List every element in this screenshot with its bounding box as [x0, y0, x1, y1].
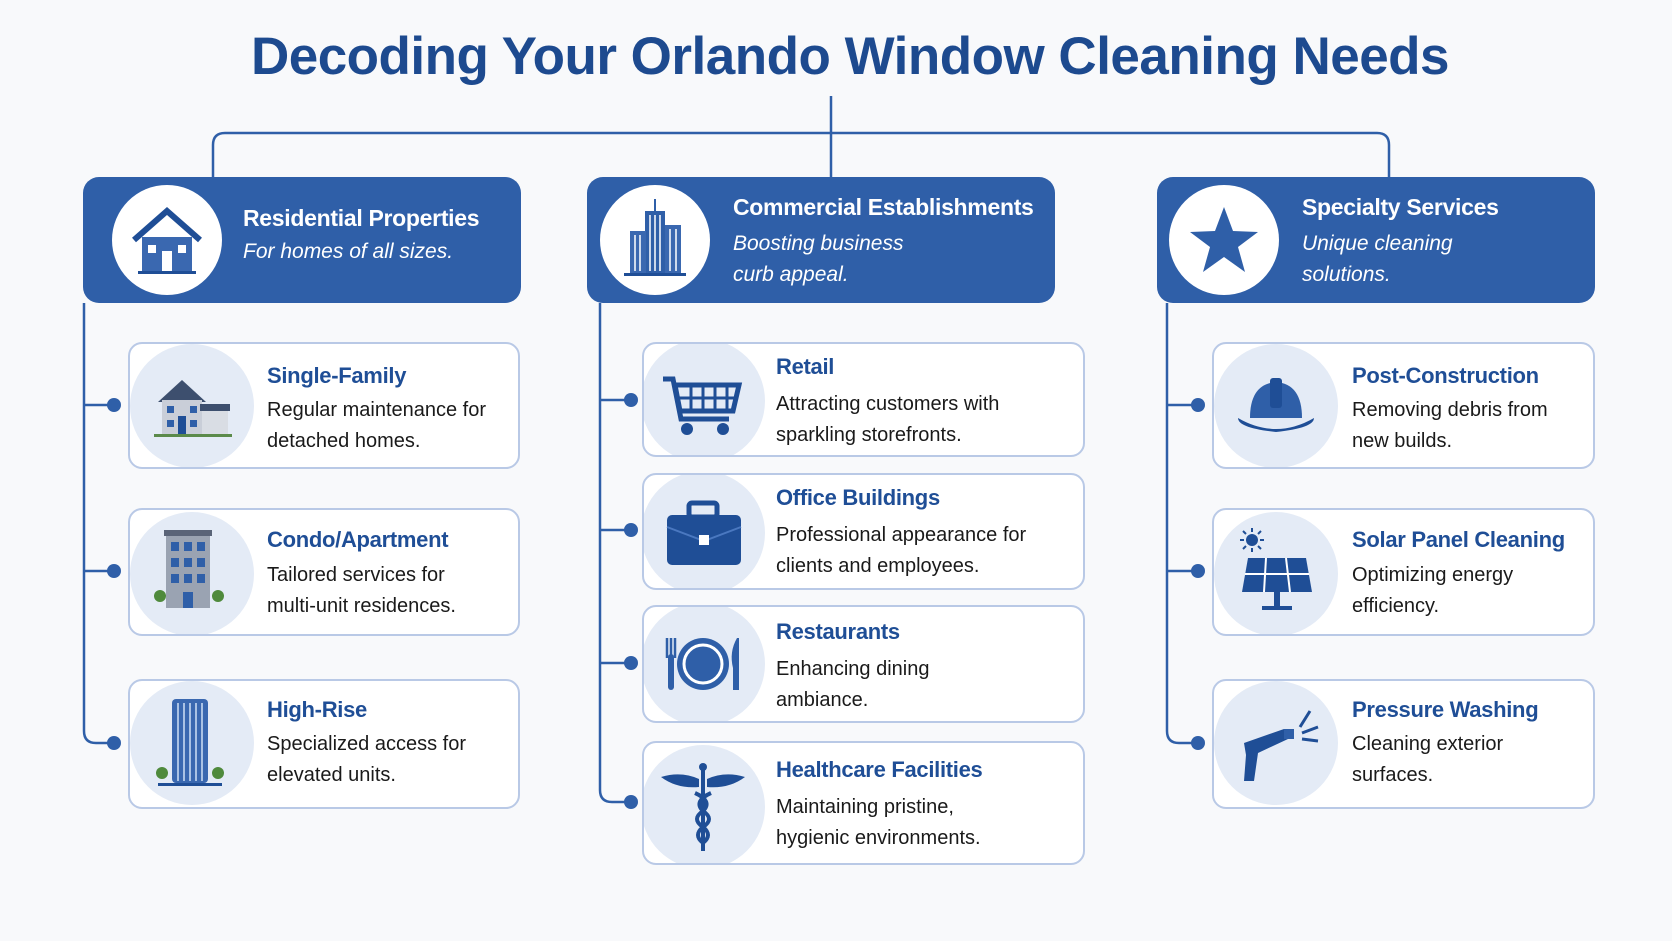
- card: single-family: Single-Family: [267, 363, 406, 388]
- title: Decoding Your Orlando Window Cleaning Needs: [251, 27, 1449, 86]
- icon: high-rise: [130, 681, 254, 805]
- card: restaurants: ambiance.: [776, 689, 868, 711]
- card: single-family: Regular maintenance for: [267, 399, 486, 421]
- icon: house: [112, 185, 222, 295]
- card: healthcare: Maintaining pristine,: [776, 796, 954, 818]
- card: restaurants: Enhancing dining: [776, 658, 929, 680]
- icon: caduceus: [641, 745, 765, 869]
- card: solar: efficiency.: [1352, 595, 1439, 617]
- panel: commercial header: [587, 177, 1055, 303]
- icon: plate: [641, 602, 765, 726]
- panel: specialty header: [1157, 177, 1595, 303]
- panel: specialty header: solutions.: [1302, 263, 1391, 286]
- card: post-construction: Removing debris from: [1352, 399, 1548, 421]
- card: pressure washing: Cleaning exterior: [1352, 733, 1503, 755]
- card: office: Professional appearance for: [776, 524, 1026, 546]
- card: office: [642, 473, 1085, 590]
- icon: house: [130, 344, 254, 468]
- card: condo: [128, 508, 520, 636]
- icon: apartment: [130, 512, 254, 636]
- card: restaurants: Restaurants: [776, 619, 900, 644]
- card: office: Office Buildings: [776, 485, 940, 510]
- panel: commercial header: Commercial Establishments: [733, 194, 1034, 220]
- card: solar: [1212, 508, 1595, 636]
- card: condo: Condo/Apartment: [267, 527, 448, 552]
- icon: skyscrapers: [600, 185, 710, 295]
- card: healthcare: hygienic environments.: [776, 827, 981, 849]
- card: solar: Solar Panel Cleaning: [1352, 527, 1565, 552]
- icon: hard hat: [1214, 344, 1338, 468]
- icon: star: [1169, 185, 1279, 295]
- panel: commercial header: Boosting business: [733, 232, 903, 255]
- card: retail: [642, 342, 1085, 457]
- card: pressure washing: surfaces.: [1352, 764, 1433, 786]
- card: office: clients and employees.: [776, 555, 979, 577]
- card: solar: Optimizing energy: [1352, 564, 1513, 586]
- card: condo: Tailored services for: [267, 564, 445, 586]
- card: retail: Retail: [776, 354, 834, 379]
- card: retail: Attracting customers with: [776, 393, 999, 415]
- card: healthcare: [642, 741, 1085, 865]
- card: single-family: detached homes.: [267, 430, 420, 452]
- card: restaurants: [642, 605, 1085, 723]
- card: high-rise: Specialized access for: [267, 733, 466, 755]
- card: high-rise: [128, 679, 520, 809]
- icon: briefcase: [641, 471, 765, 595]
- card: single-family: [128, 342, 520, 469]
- panel: residential header: [83, 177, 521, 303]
- panel: commercial header: curb appeal.: [733, 263, 849, 286]
- card: high-rise: High-Rise: [267, 697, 367, 722]
- panel: specialty header: Specialty Services: [1302, 194, 1499, 220]
- card: pressure washing: Pressure Washing: [1352, 697, 1538, 722]
- card: retail: sparkling storefronts.: [776, 424, 962, 446]
- panel: residential header: For homes of all sizes.: [243, 240, 453, 263]
- card: post-construction: [1212, 342, 1595, 469]
- card: healthcare: Healthcare Facilities: [776, 757, 982, 782]
- card: high-rise: elevated units.: [267, 764, 396, 786]
- panel: residential header: Residential Properties: [243, 205, 479, 231]
- card: post-construction: new builds.: [1352, 430, 1452, 452]
- card: condo: multi-unit residences.: [267, 595, 456, 617]
- card: post-construction: Post-Construction: [1352, 363, 1539, 388]
- card: pressure washing: [1212, 679, 1595, 809]
- icon: solar panel: [1214, 512, 1338, 636]
- panel: specialty header: Unique cleaning: [1302, 232, 1453, 255]
- icon: cart: [641, 339, 765, 463]
- icon: spray gun: [1214, 681, 1338, 805]
